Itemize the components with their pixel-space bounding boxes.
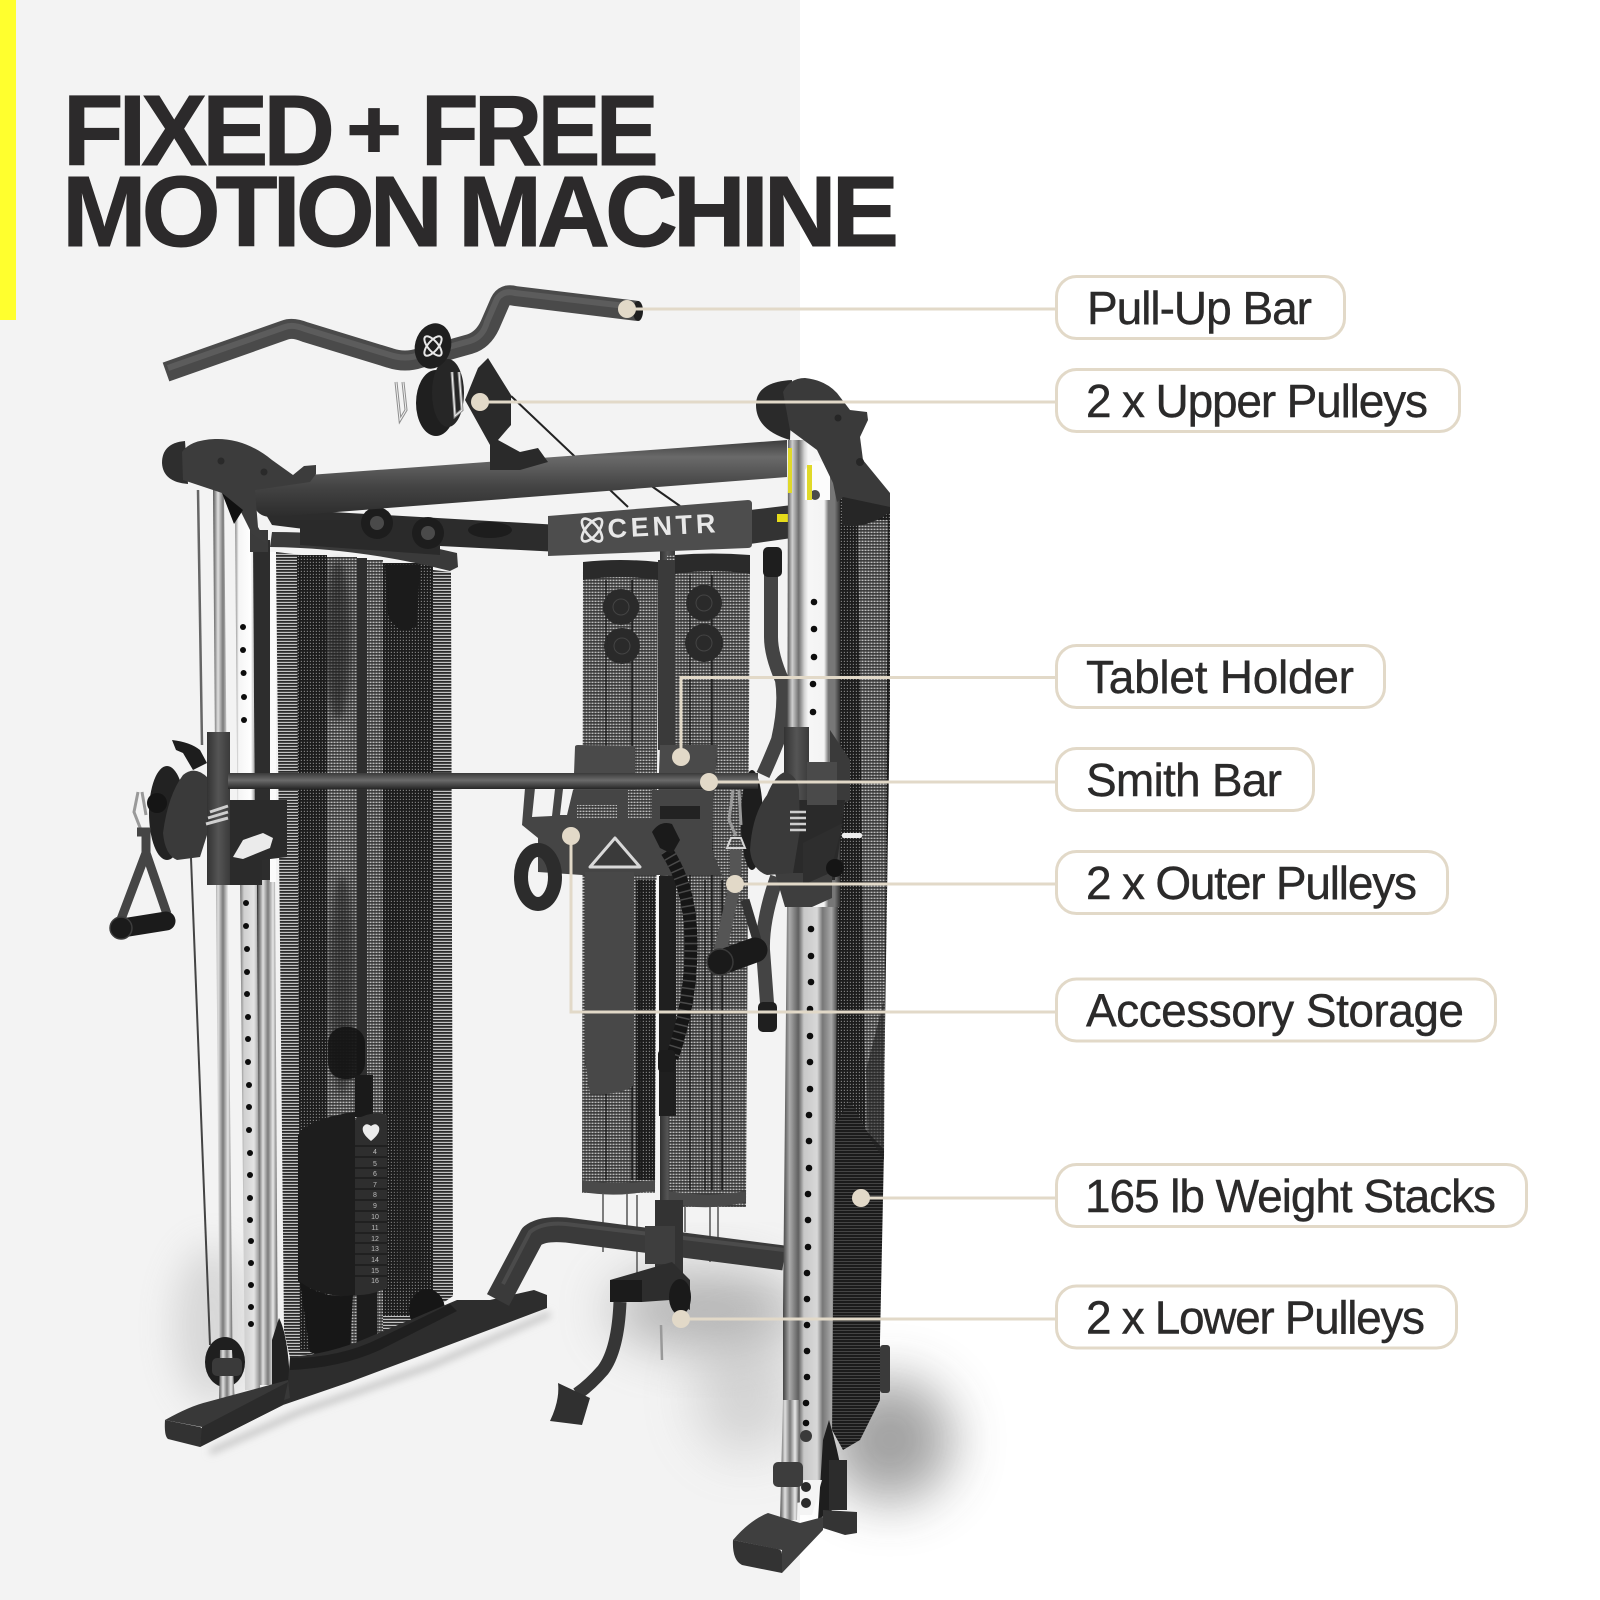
left weight stack: 5 (373, 1161, 377, 1168)
smith bar (228, 773, 758, 789)
callout: 2 x Outer Pulleys: 2 x Outer Pulleys (1086, 857, 1417, 909)
curved hanging rod (758, 547, 783, 1032)
callout: Smith Bar (1056, 748, 1314, 810)
right carriage with D-handle (707, 727, 862, 975)
left weight stack: 13 (371, 1246, 379, 1253)
rear leg and center base (498, 1200, 784, 1425)
callout: Smith Bar: Smith Bar (1086, 754, 1282, 806)
callout: Pull-Up Bar (1056, 276, 1344, 338)
hanging accessories: strap, triangle handle, rope (521, 823, 691, 1094)
cables from upper pulley (511, 396, 680, 507)
left weight stack: 4 (373, 1149, 377, 1156)
left carriage with D-handle (110, 732, 287, 939)
floor shadows (174, 1245, 952, 1502)
callout: 2 x Upper Pulleys: 2 x Upper Pulleys (1086, 375, 1428, 427)
title (62, 75, 895, 268)
leader: Tablet Holder (672, 678, 1057, 766)
leader: Smith Bar (700, 773, 1057, 791)
right pulley housing (756, 378, 890, 507)
right tower chrome column (773, 440, 847, 1520)
CENTR logo plate: CENTR (607, 508, 716, 544)
left weight stack: 15 (371, 1268, 379, 1275)
left weight stack: 7 (373, 1182, 377, 1189)
left weight stack: 9 (373, 1203, 377, 1210)
left weight stack: 11 (371, 1225, 379, 1232)
leader: Pull-Up Bar (618, 300, 1057, 318)
left weight stack: 14 (371, 1257, 379, 1264)
center mesh weight shrouds (582, 548, 750, 1290)
left upright column (191, 490, 290, 1405)
panel: light grey background (0, 0, 800, 1600)
callout: Tablet Holder: Tablet Holder (1086, 651, 1354, 703)
callout: 2 x Lower Pulleys: 2 x Lower Pulleys (1086, 1292, 1425, 1344)
leader: 2 x Lower Pulleys (672, 1310, 1057, 1328)
left weight stack: 16 (371, 1278, 379, 1285)
title: FIXED (63, 75, 332, 187)
fitness machine illustration (110, 292, 890, 1573)
right mesh shroud (832, 493, 890, 1450)
tablet holder and accessory storage plate (522, 745, 722, 875)
pull-up bar with center mount (166, 292, 643, 470)
left weight stack: 10 (371, 1214, 379, 1221)
yellow accent bar (0, 0, 16, 320)
left weight stack (298, 1027, 445, 1357)
callout: Tablet Holder (1056, 646, 1384, 708)
title: FREE (421, 75, 655, 187)
left base rail and foot (165, 1290, 547, 1447)
title: MOTION (62, 156, 438, 268)
left weight stack: 8 (373, 1192, 377, 1199)
callout: Accessory Storage: Accessory Storage (1086, 984, 1464, 1036)
left pulley housing (162, 439, 316, 545)
leader: 2 x Outer Pulleys (726, 875, 1057, 893)
CENTR logo plate (548, 500, 752, 556)
left mesh shroud (276, 552, 453, 1358)
leader: Accessory Storage (562, 827, 1057, 1012)
right tower foot (733, 1510, 857, 1573)
rear frame and pulleys (262, 505, 792, 571)
left weight stack: 12 (371, 1236, 379, 1243)
leader: 165 lb Weight Stacks (852, 1189, 1057, 1207)
top crossbar tube (253, 440, 787, 517)
callout: 165 lb Weight Stacks: 165 lb Weight Stacks (1085, 1170, 1496, 1222)
callout: Pull-Up Bar: Pull-Up Bar (1087, 282, 1312, 334)
leader: 2 x Upper Pulleys (471, 393, 1057, 411)
title: MACHINE (458, 156, 895, 268)
title: + (346, 82, 402, 176)
left weight stack: 6 (373, 1171, 377, 1178)
